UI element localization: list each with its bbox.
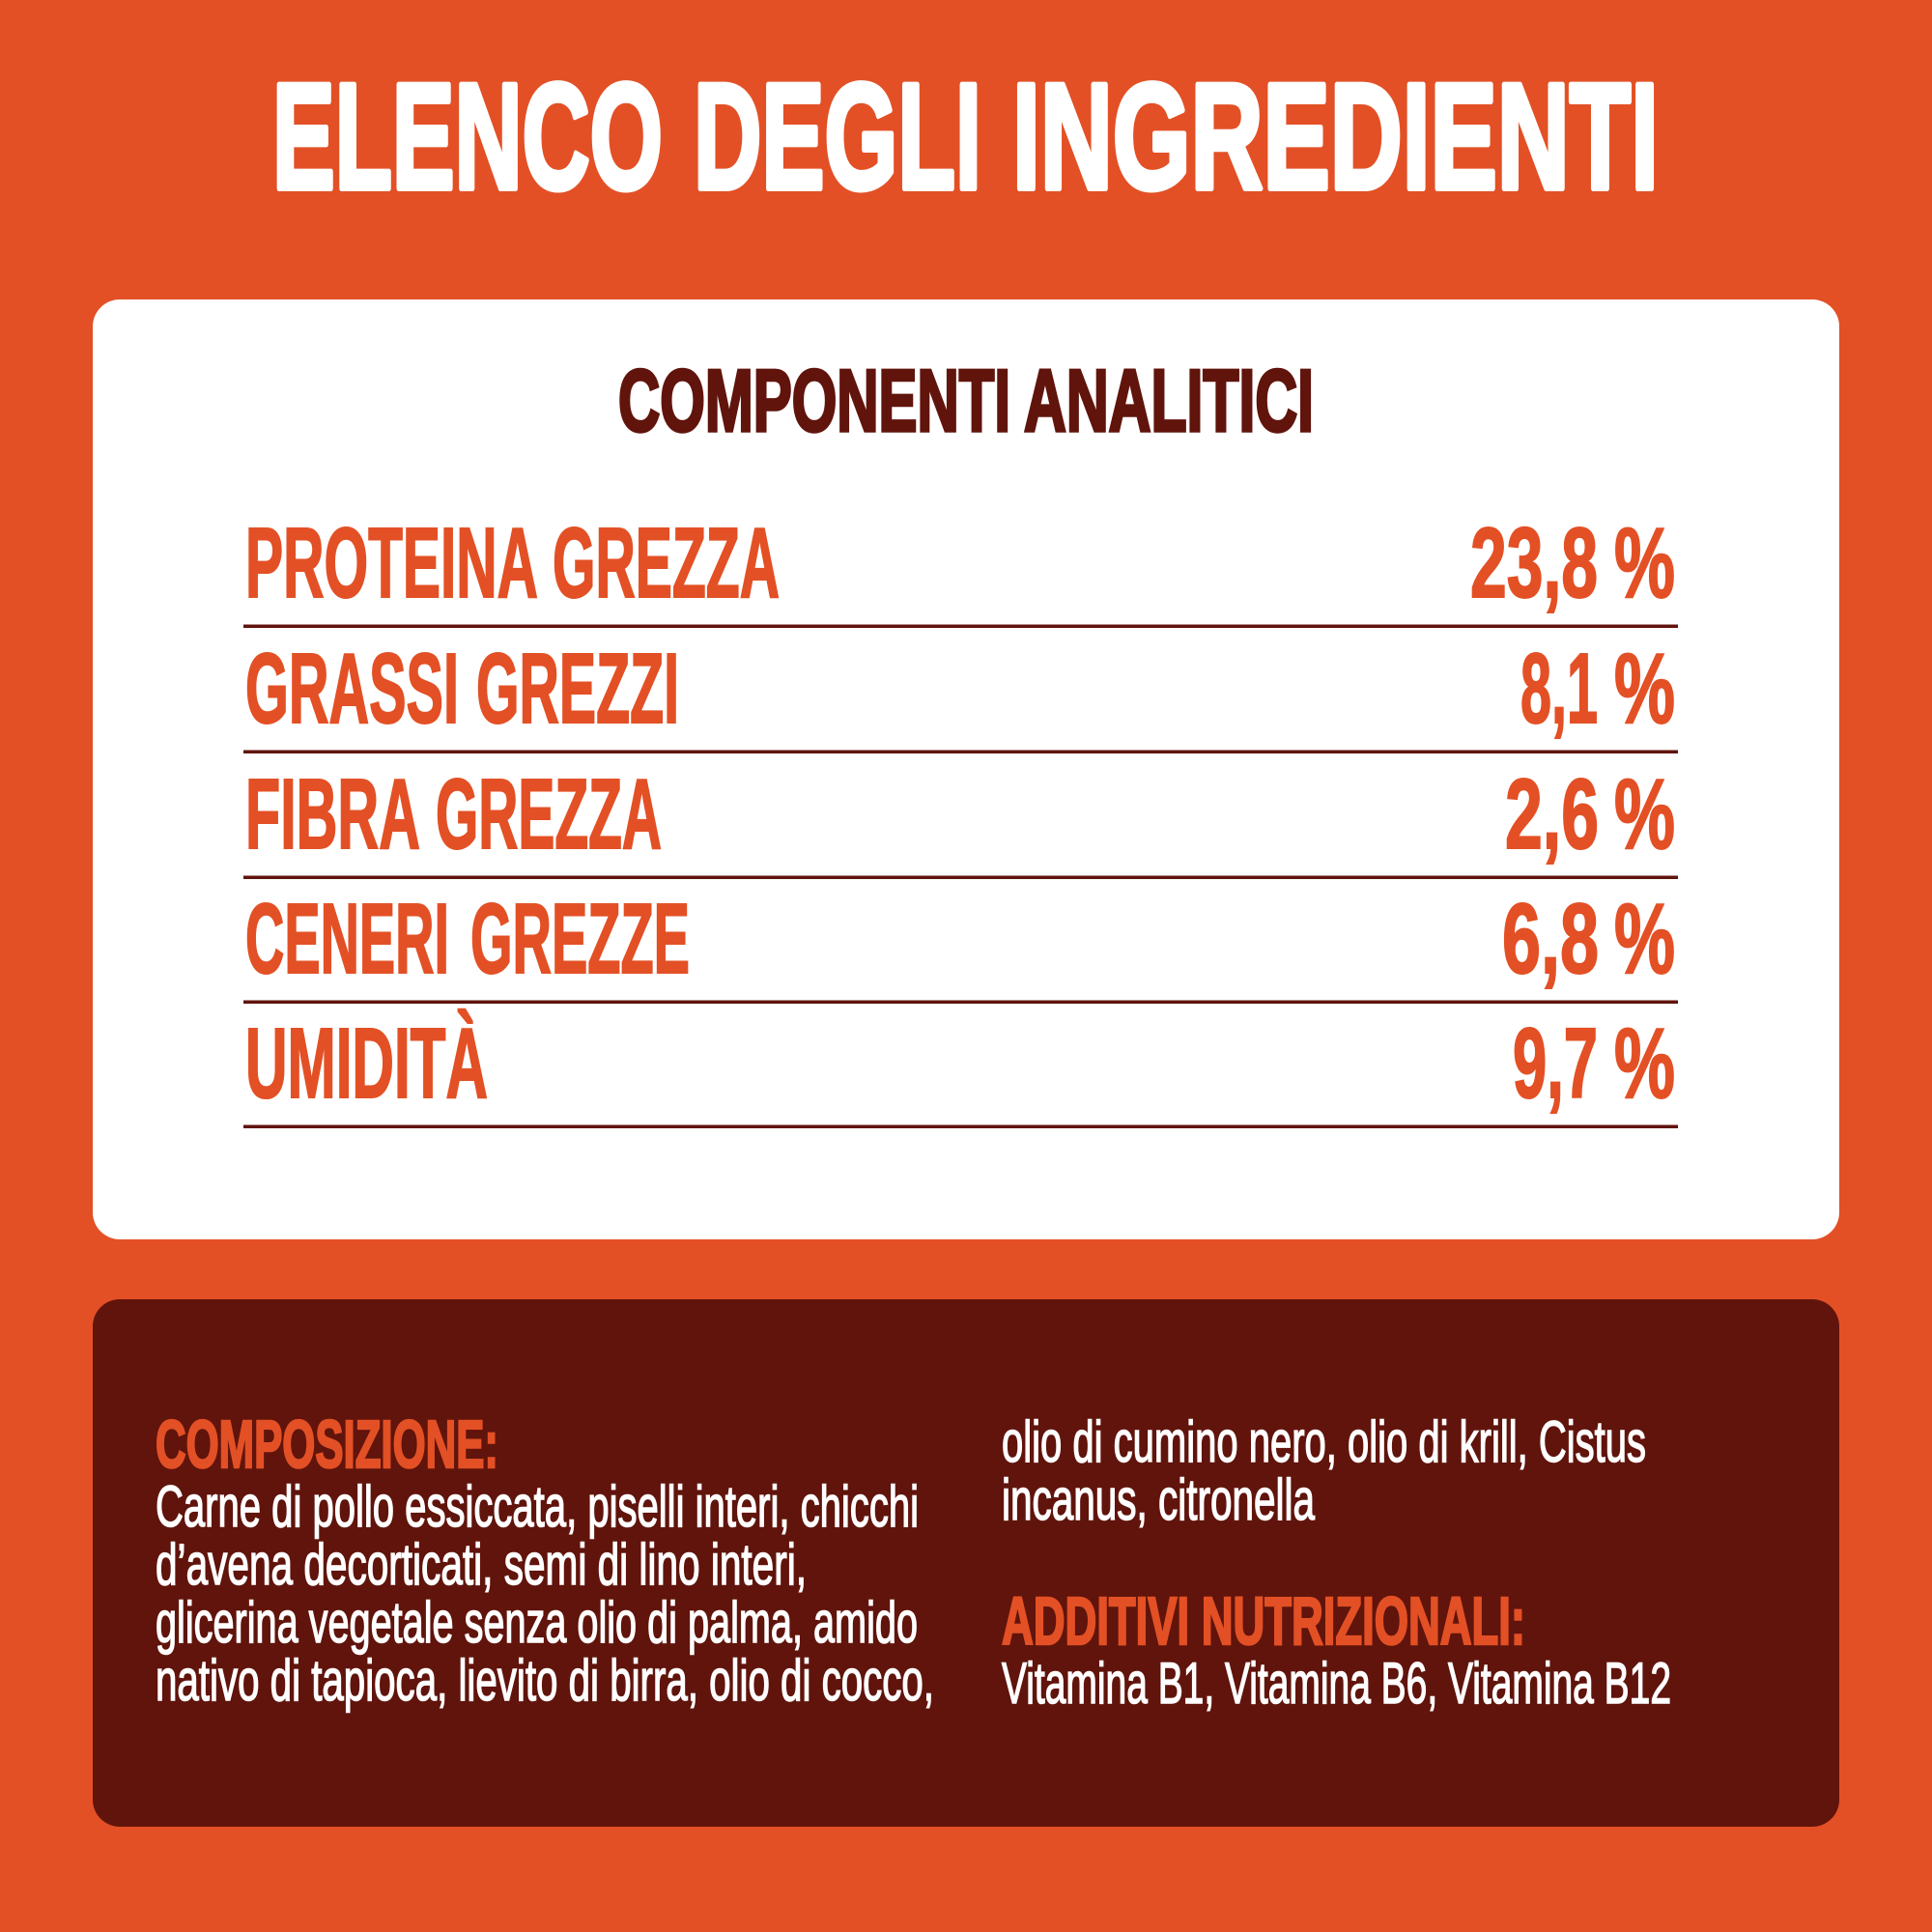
row: fibra grezza: % [1614,758,1675,869]
text block: composition right column [1002,1409,1646,1532]
text block: composition left column: d’avena decorticati, semi di lino interi, [156,1532,807,1597]
row: ceneri grezze: 6,8 [1502,883,1599,994]
text block: composition left column: glicerina vegetale senza olio di palma, amido [156,1590,918,1655]
panel heading: ANALITICI [1024,353,1314,450]
text block: composition left column: nativo di tapioca, lievito di birra, olio di cocco, [156,1648,934,1713]
row: grassi grezzi: GREZZI [476,633,679,744]
row: ceneri grezze: % [1614,883,1675,994]
row: ceneri grezze [243,883,1678,1004]
row: proteina grezza: 23,8 [1470,507,1598,618]
row: ceneri grezze: GREZZE [470,883,690,994]
row: grassi grezzi: % [1614,633,1675,744]
panel: composizione [93,1299,1839,1827]
row: umidità [243,1008,1678,1128]
row: ceneri grezze: CENERI [245,883,449,994]
row: proteina grezza: % [1614,507,1675,618]
row: fibra grezza [243,758,1678,879]
title [272,53,1659,221]
row: grassi grezzi: 8,1 [1520,633,1598,744]
row: umidità: 9,7 [1513,1008,1598,1119]
title: DEGLI [694,53,981,221]
heading: additivi nutrizionali: ADDITIVI NUTRIZIONALI: [1002,1583,1525,1659]
panel heading: COMPONENTI [618,353,1010,450]
row: fibra grezza: GREZZA [436,758,662,869]
text block: composition right column: incanus, citronella [1002,1467,1315,1532]
row: proteina grezza: GREZZA [553,507,780,618]
row: fibra grezza: 2,6 [1505,758,1599,869]
panel: componenti analitici [93,299,1839,1239]
row: grassi grezzi [243,633,1678,753]
row: proteina grezza: PROTEINA [245,507,538,618]
heading: composizione: COMPOSIZIONE: [156,1406,498,1482]
row: grassi grezzi: GRASSI [245,633,459,744]
text block: composition left column: Carne di pollo essiccata, piselli interi, chicchi [156,1474,919,1539]
row: umidità: UMIDITÀ [245,1008,488,1119]
row: proteina grezza [243,507,1678,628]
row: fibra grezza: FIBRA [245,758,420,869]
title: ELENCO [272,53,663,221]
text block: composition left column [156,1474,934,1713]
row: umidità: % [1614,1008,1675,1119]
